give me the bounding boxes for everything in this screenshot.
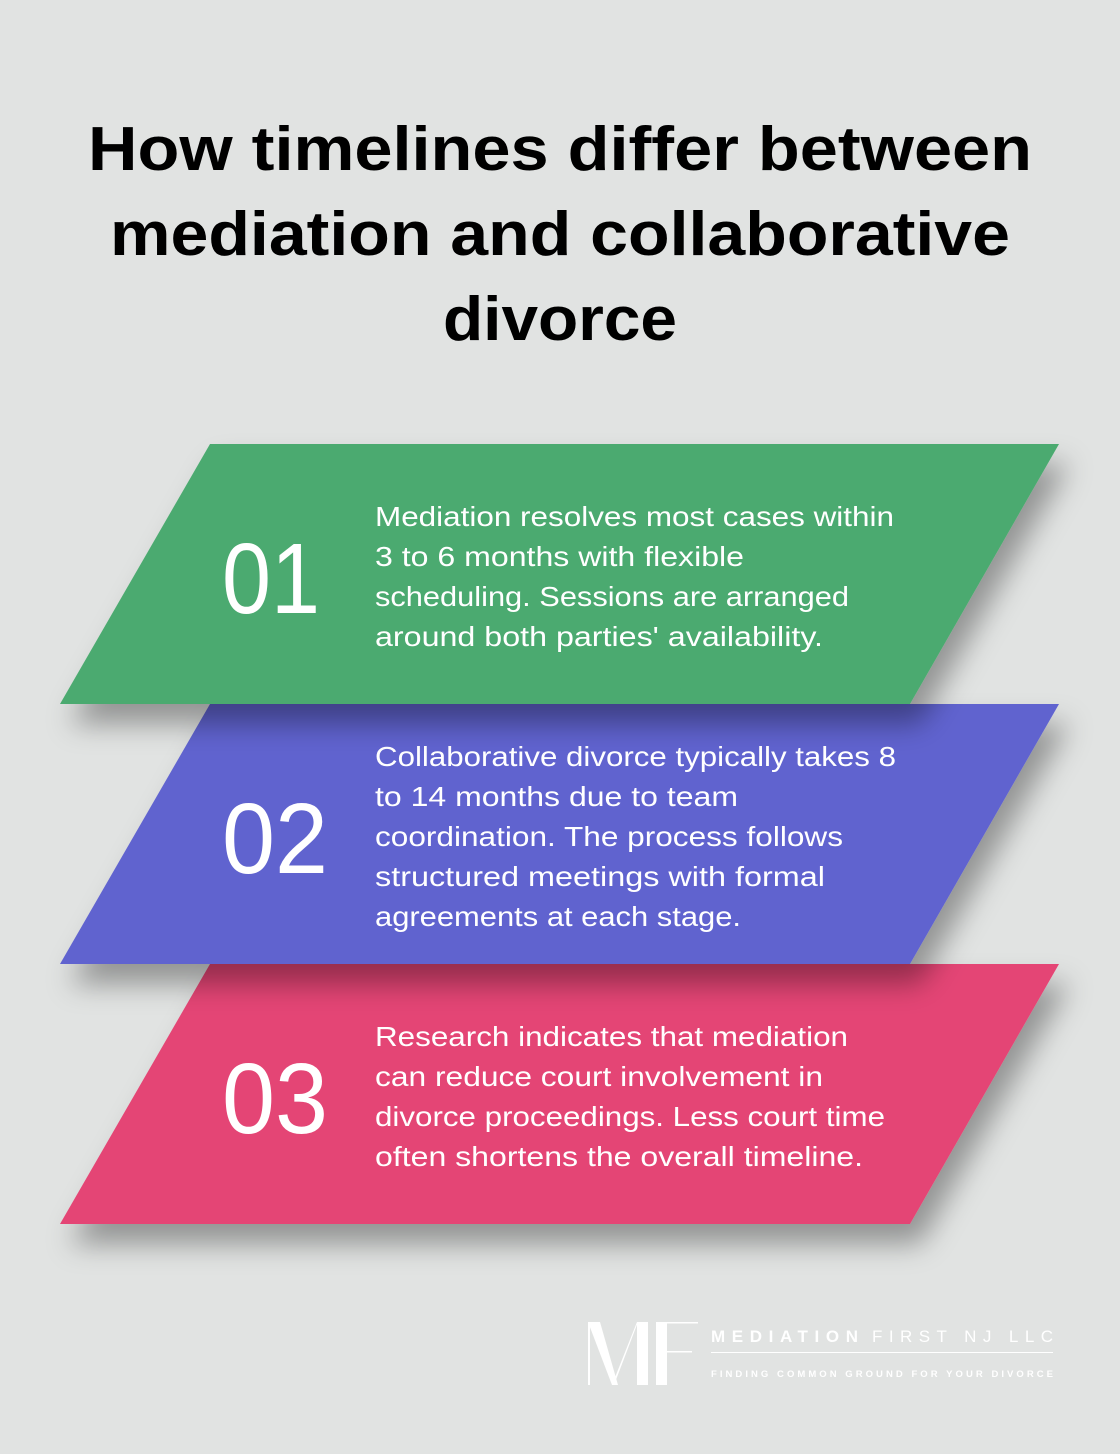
panel: 01 (60, 444, 1059, 704)
text 03: often shortens the overall timeline. (375, 1141, 863, 1172)
number 01: 01 (222, 523, 320, 635)
title: mediation and collaborative (110, 200, 1010, 269)
number 03: 03 (222, 1043, 328, 1155)
logo text: FINDING COMMON GROUND FOR YOUR DIVORCE (711, 1369, 1053, 1380)
logo text (711, 1327, 1053, 1380)
logo text: FIRST NJ LLC (872, 1327, 1053, 1346)
text 03 (375, 1021, 885, 1172)
text 03: divorce proceedings. Less court time (375, 1101, 885, 1132)
text 01: scheduling. Sessions are arranged (375, 581, 849, 612)
panel: 03 (60, 964, 1059, 1224)
logo text: MEDIATION (711, 1327, 858, 1346)
text 02: to 14 months due to team (375, 781, 738, 812)
text 03: can reduce court involvement in (375, 1061, 823, 1092)
text 02: coordination. The process follows (375, 821, 843, 852)
text 02: agreements at each stage. (375, 901, 741, 932)
icon: MF monogram (588, 1322, 698, 1385)
title (88, 115, 1032, 354)
title: divorce (443, 285, 677, 354)
text 03: Research indicates that mediation (375, 1021, 848, 1052)
text 02: structured meetings with formal (375, 861, 825, 892)
text 02: Collaborative divorce typically takes 8 (375, 741, 896, 772)
text 01 (375, 501, 894, 652)
text 01: around both parties' availability. (375, 621, 823, 652)
logo (588, 1322, 1053, 1385)
text 01: 3 to 6 months with flexible (375, 541, 744, 572)
title: How timelines differ between (88, 115, 1032, 184)
text 01: Mediation resolves most cases within (375, 501, 894, 532)
number 02: 02 (222, 783, 328, 895)
panel: 02 (60, 704, 1059, 964)
text 02 (375, 741, 896, 932)
